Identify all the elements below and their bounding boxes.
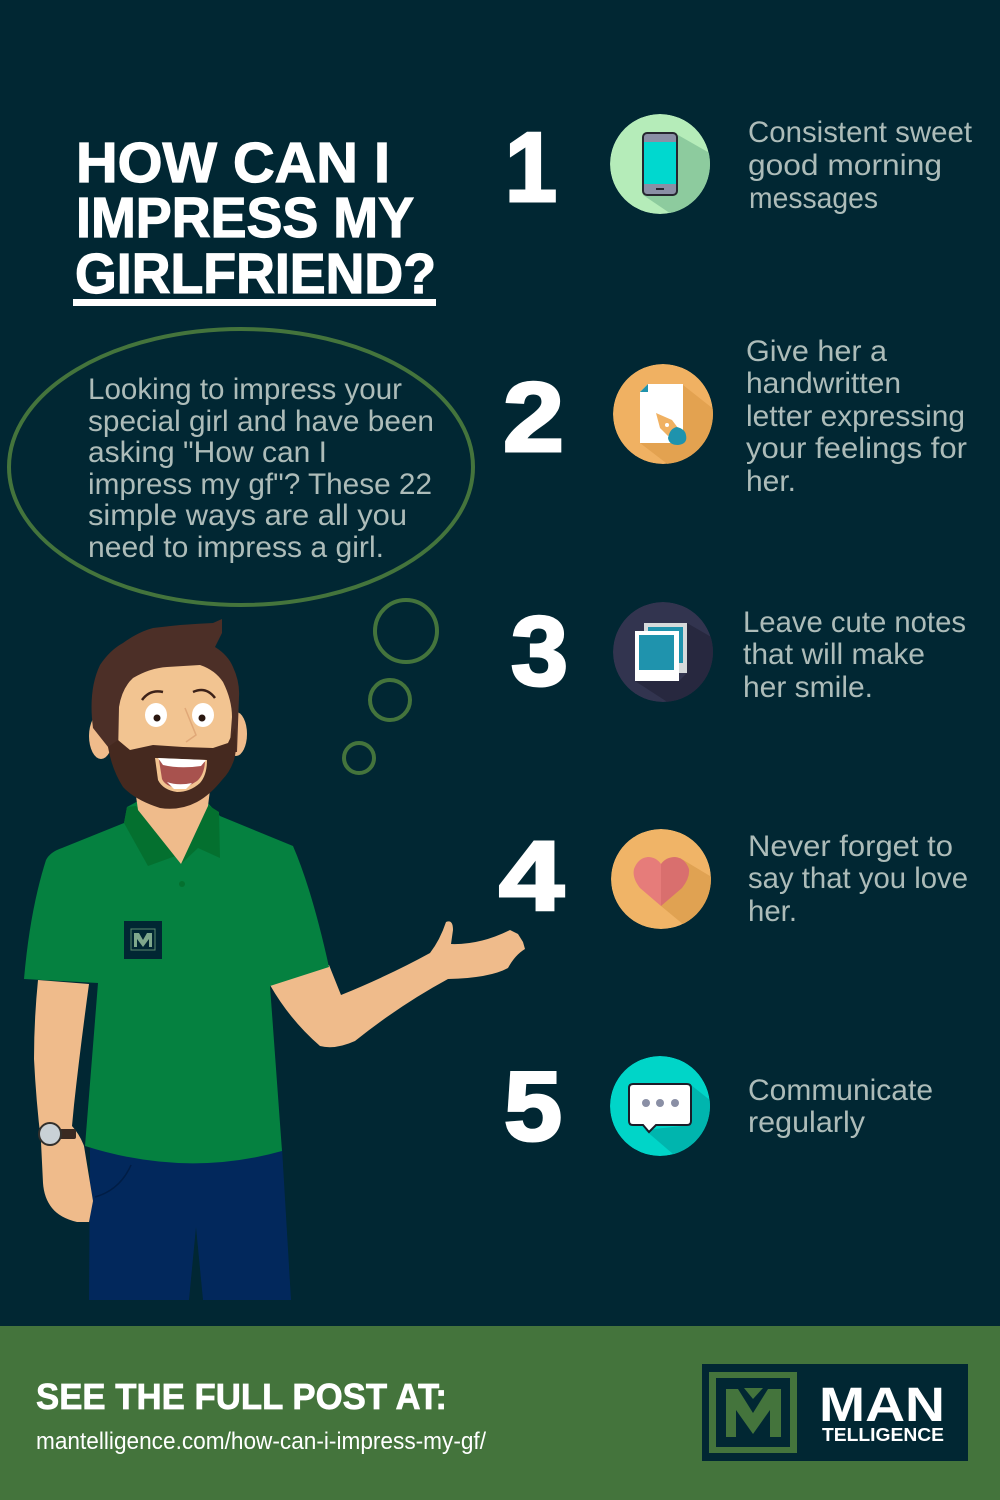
number 3: 3 — [511, 596, 568, 706]
text 4 — [748, 830, 968, 928]
collar — [124, 806, 181, 866]
thought bubble — [9, 329, 473, 605]
logo wordmark: MAN — [819, 1379, 945, 1432]
thought bubble trail — [344, 600, 437, 773]
nose — [185, 708, 196, 742]
number 4: 4 — [499, 821, 564, 931]
shirt button — [179, 881, 185, 887]
intro text: need to impress a girl. — [88, 531, 384, 564]
title: GIRLFRIEND? — [75, 242, 436, 306]
intro text: impress my gf"? These 22 — [88, 468, 432, 501]
text 5 — [748, 1074, 933, 1139]
number 2: 2 — [503, 362, 564, 472]
intro text: special girl and have been — [88, 405, 434, 438]
logo — [702, 1364, 968, 1461]
hair — [92, 619, 239, 752]
right arm and hand — [270, 921, 525, 1047]
text 2: letter expressing — [746, 400, 965, 433]
item 5 — [505, 1056, 932, 1156]
text 2: your feelings for — [746, 432, 967, 465]
text 4: her. — [748, 895, 797, 928]
icon: heart — [611, 829, 711, 929]
text 1: messages — [749, 182, 878, 215]
text 2 — [746, 335, 967, 498]
intro text: Looking to impress your — [88, 373, 402, 406]
logo mark — [709, 1372, 797, 1453]
item 3 — [512, 602, 965, 702]
wrist watch — [39, 1123, 76, 1145]
eyes — [145, 703, 214, 727]
text 1 — [748, 116, 973, 215]
text 5: Communicate — [748, 1074, 933, 1107]
icon: chat bubble — [610, 1056, 710, 1156]
left arm and hand — [34, 980, 93, 1222]
text 5: regularly — [748, 1106, 865, 1139]
text 3 — [743, 606, 966, 704]
text 4: Never forget to — [748, 830, 953, 863]
number 1: 1 — [505, 112, 557, 222]
icon: photos — [613, 602, 713, 702]
title: IMPRESS MY — [76, 186, 414, 250]
title — [73, 131, 436, 306]
text 3: Leave cute notes — [743, 606, 966, 639]
mouth — [155, 758, 207, 792]
item 1 — [509, 114, 972, 214]
number 5: 5 — [504, 1051, 562, 1161]
intro text — [88, 373, 434, 564]
man character — [24, 619, 525, 1300]
logo wordmark: TELLIGENCE — [822, 1425, 944, 1445]
text 2: handwritten — [746, 367, 901, 400]
text 1: Consistent sweet — [748, 116, 973, 149]
face — [118, 665, 232, 756]
badge — [124, 921, 162, 959]
text 1: good morning — [748, 149, 942, 182]
text 2: her. — [746, 465, 796, 498]
text 3: her smile. — [743, 671, 873, 704]
neck — [136, 790, 210, 864]
footer heading: SEE THE FULL POST AT: — [36, 1376, 447, 1417]
footer band — [0, 1326, 1000, 1500]
footer url: mantelligence.com/how-can-i-impress-my-gf/ — [36, 1428, 486, 1455]
logo wordmark — [819, 1379, 945, 1445]
eyebrows — [142, 690, 215, 700]
title: HOW CAN I — [76, 131, 390, 195]
beard — [108, 728, 236, 809]
text 2: Give her a — [746, 335, 887, 368]
icon: phone — [610, 114, 710, 214]
text 4: say that you love — [748, 862, 968, 895]
ears — [89, 712, 247, 759]
icon: letter and pen — [613, 364, 713, 464]
text 3: that will make — [743, 638, 925, 671]
item 2 — [503, 335, 967, 498]
green polo shirt — [24, 800, 329, 1163]
trousers — [89, 1148, 291, 1300]
intro text: simple ways are all you — [88, 499, 407, 532]
intro text: asking "How can I — [88, 436, 327, 469]
item 4 — [498, 829, 967, 929]
